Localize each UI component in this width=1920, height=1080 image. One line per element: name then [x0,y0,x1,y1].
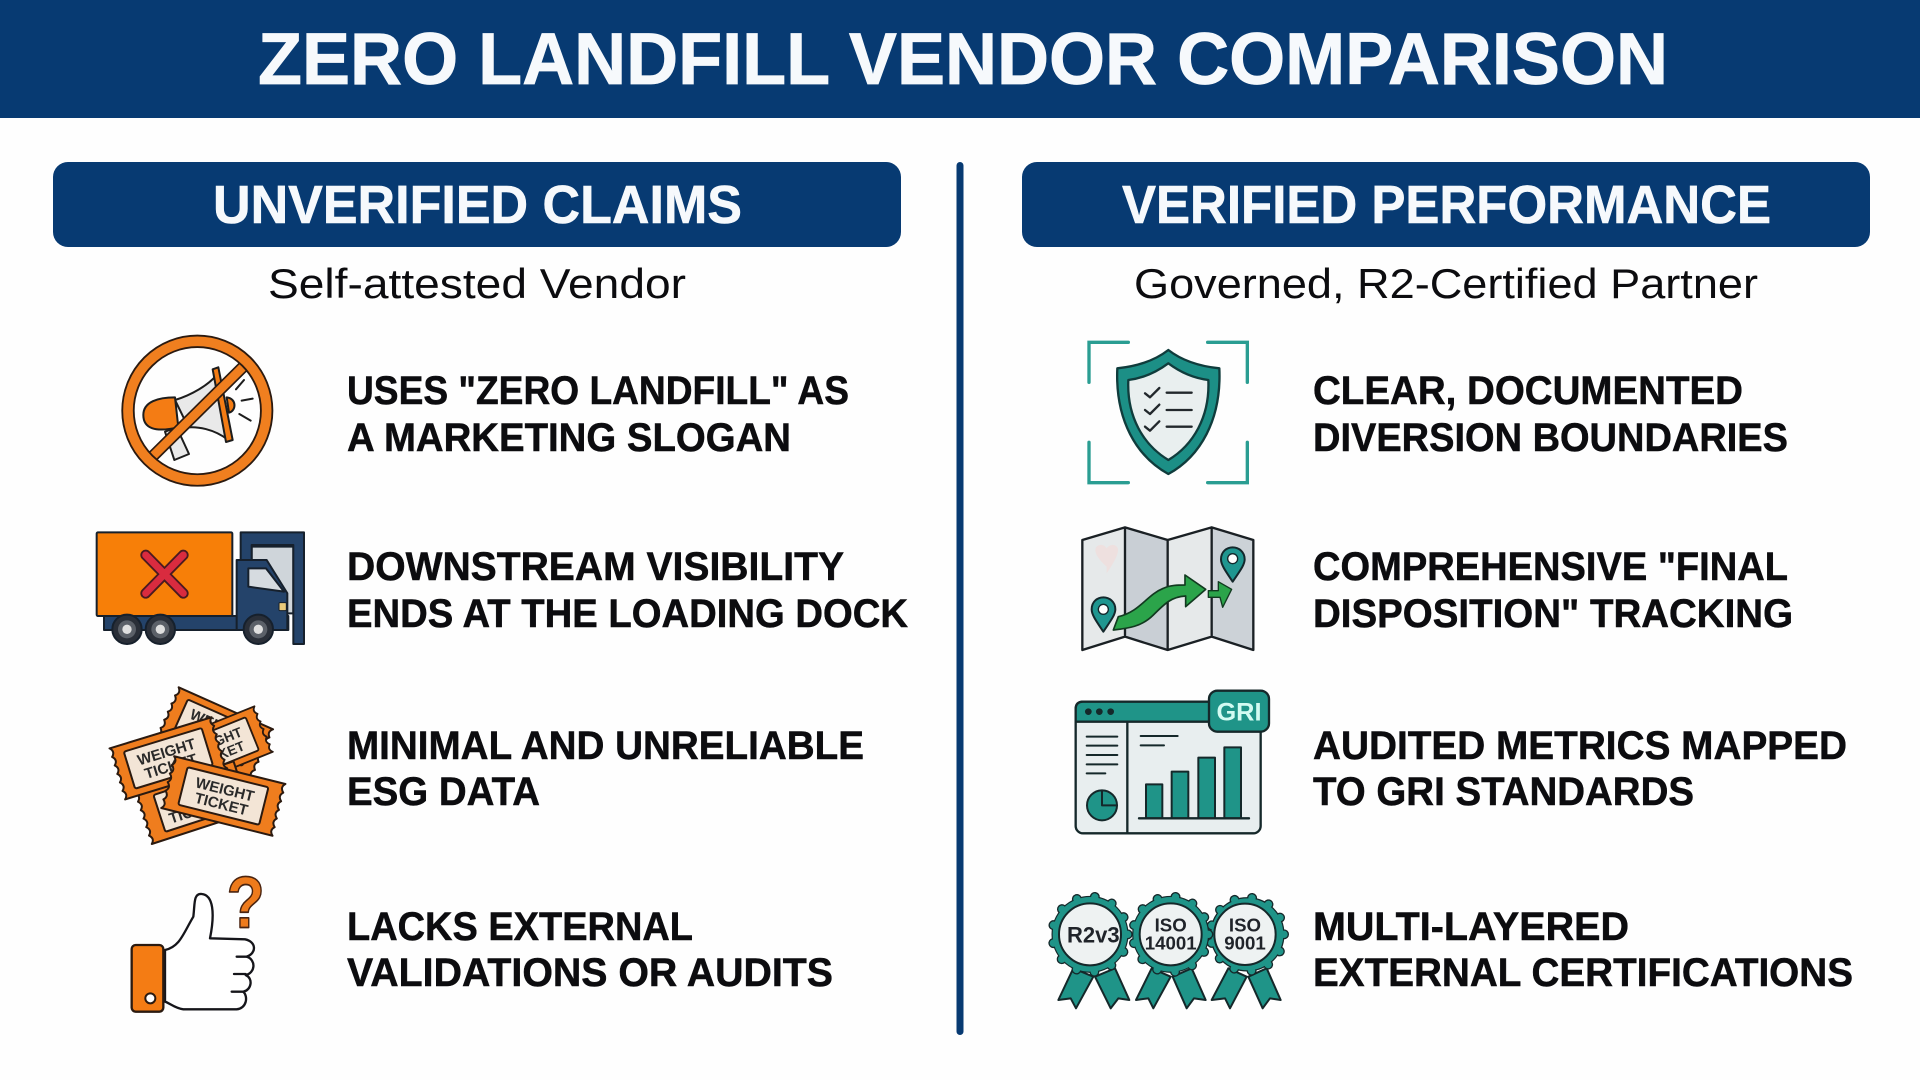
icon: certification badges [1052,897,1284,1008]
icon: GRI dashboard [1076,691,1269,833]
icon: shield checklist [1089,342,1247,483]
icon: GRI dashboard: GRI [1216,698,1262,726]
subtitle: governed partner: Governed, R2-Certified Partner [1134,260,1758,307]
text: diversion boundaries: DIVERSION BOUNDARIES [1313,416,1788,460]
icon: weight tickets: TICKET [193,790,250,819]
text: audited metrics: AUDITED METRICS MAPPED [1313,724,1847,768]
icon: thumbs up with question mark: ? [227,862,265,943]
text: minimal ESG data: ESG DATA [347,770,540,814]
heading: verified performance: VERIFIED PERFORMANCE [1122,175,1771,235]
panel: unverified claims [53,162,908,1012]
icon: thumbs up with question mark [132,862,265,1012]
icon: truck at loading dock [97,532,304,644]
text: marketing slogan: USES "ZERO LANDFILL" AS [347,369,849,413]
text: downstream visibility: ENDS AT THE LOADING DOCK [347,592,908,636]
text: final disposition tracking: COMPREHENSIVE "FINAL [1313,545,1788,589]
badge: ISO 14001 [1133,897,1208,1008]
icon: crossed-out megaphone [128,341,267,480]
icon: weight tickets: TICKET [195,738,247,771]
text: marketing slogan [347,369,849,460]
text: lacks validations: VALIDATIONS OR AUDITS [347,951,833,995]
subtitle: self-attested vendor: Self-attested Vendor [268,260,686,307]
text: diversion boundaries: CLEAR, DOCUMENTED [1313,369,1743,413]
text: external certifications [1313,905,1853,995]
text: diversion boundaries [1313,369,1788,460]
heading: unverified claims [53,162,901,247]
badge: ISO 9001: 9001 [1224,932,1266,953]
icon: weight tickets: WEIGHT [187,706,249,746]
text: external certifications: EXTERNAL CERTIFICATIONS [1313,951,1853,995]
badge: R2v3: R2v3 [1067,923,1120,948]
icon: weight tickets: WEIGHT [135,736,198,769]
icon: weight tickets: WEIGHT [188,724,245,759]
icon: weight tickets: WEIGHT [194,775,256,806]
text: final disposition tracking [1313,545,1793,636]
heading: unverified claims: UNVERIFIED CLAIMS [213,175,742,235]
icon: weight tickets [110,687,285,844]
heading: verified performance [1022,162,1870,247]
panel: verified performance [1022,162,1870,1008]
text: downstream visibility [347,545,908,636]
icon: weight tickets: TICKET [143,751,199,783]
text: lacks validations: LACKS EXTERNAL [347,905,693,949]
text: minimal ESG data: MINIMAL AND UNRELIABLE [347,724,864,768]
badge: ISO 14001: 14001 [1145,932,1197,953]
text: audited metrics: TO GRI STANDARDS [1313,770,1694,814]
text: downstream visibility: DOWNSTREAM VISIBILITY [347,545,844,589]
text: marketing slogan: A MARKETING SLOGAN [347,416,791,460]
badge: R2v3 [1052,897,1129,1008]
text: minimal ESG data [347,724,864,814]
text: lacks validations [347,905,833,995]
text: final disposition tracking: DISPOSITION" TRACKING [1313,592,1793,636]
badge: ISO 9001: ISO [1229,915,1261,936]
icon: map with route [1082,527,1253,650]
text: external certifications: MULTI-LAYERED [1313,905,1629,949]
text: audited metrics [1313,724,1847,814]
badge: ISO 9001 [1211,898,1284,1008]
badge: ISO 14001: ISO [1155,915,1187,936]
title banner: ZERO LANDFILL VENDOR COMPARISON [258,19,1668,100]
icon: weight tickets: TICKET [167,795,224,828]
title banner [0,0,1920,118]
